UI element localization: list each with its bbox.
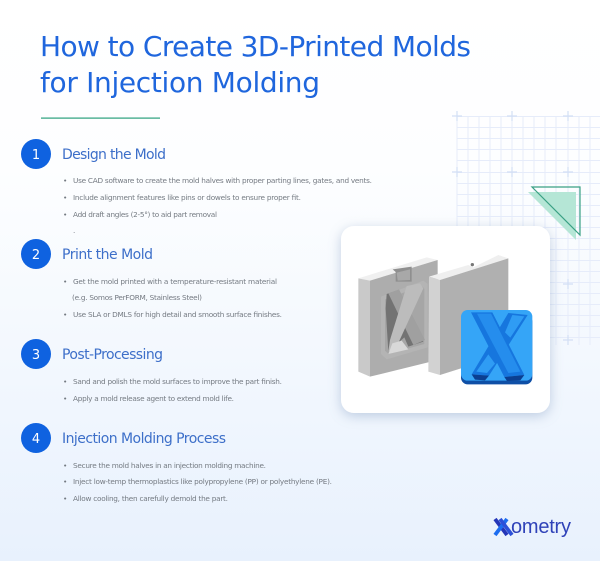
title: How to Create 3D-Printed Molds [40,30,471,63]
right mold half [428,255,508,375]
step 4: injection molding process [21,423,332,503]
step 2 number badge [21,239,51,269]
step 4 heading: Injection Molding Process [62,431,226,447]
step 2 bullets: • [63,310,67,319]
left mold half [358,257,438,377]
step 1 bullets: • [63,210,67,219]
step 2 heading: Print the Mold [62,247,153,263]
step 2 bullets: • [63,277,67,286]
step 3 bullets: • [63,394,67,403]
step 1 bullets: Add draft angles (2-5°) to aid part removal [73,210,217,219]
step 3 number badge [21,339,51,369]
step 1 bullets [63,176,372,235]
step 4 bullets: Allow cooling, then carefully demold the part. [73,494,228,503]
step 3 heading: Post-Processing [62,347,163,363]
step 4 bullets [63,461,332,503]
background grid [452,111,600,345]
step 2 bullets: (e.g. Somos PerFORM, Stainless Steel) [72,293,202,302]
title [40,30,471,99]
step 4 number badge: 4 [32,432,40,447]
step 4 number badge [21,423,51,453]
step 4 bullets: Inject low-temp thermoplastics like polypropylene (PP) or polyethylene (PE). [73,477,332,486]
step 3: post-processing [21,339,282,403]
step 4 bullets: • [63,477,67,486]
title divider [41,118,160,119]
title: for Injection Molding [40,66,320,99]
step 1 bullets: Use CAD software to create the mold halves with proper parting lines, gates, and vents. [73,176,372,185]
step 1 bullets: • [63,176,67,185]
image card [341,226,550,413]
blue X part [461,310,532,384]
logo wordmark: ometry [511,516,571,538]
step 1: design the mold [21,139,372,235]
step 3 bullets [63,377,282,403]
step 1 number badge [21,139,51,169]
mold illustration [358,255,532,384]
step 2: print the mold [21,239,282,319]
step 1 bullets: . [73,226,75,235]
step 3 bullets: • [63,377,67,386]
step 3 number badge: 3 [32,348,40,363]
step 3 bullets: Sand and polish the mold surfaces to improve the part finish. [73,377,282,386]
step 4 bullets: Secure the mold halves in an injection molding machine. [73,461,266,470]
logo mark [495,519,512,535]
step 1 heading: Design the Mold [62,147,166,163]
step 2 number badge: 2 [32,248,40,263]
step 2 bullets [63,277,282,319]
xometry logo [495,516,571,538]
step 2 bullets: Get the mold printed with a temperature-resistant material [73,277,277,286]
step 4 bullets: • [63,461,67,470]
step 1 number badge: 1 [32,148,40,163]
step 3 bullets: Apply a mold release agent to extend mold life. [73,394,234,403]
step 4 bullets: • [63,494,67,503]
step 1 bullets: Include alignment features like pins or dowels to ensure proper fit. [73,193,301,202]
step 1 bullets: • [63,193,67,202]
decorative green triangle [528,187,580,240]
step 2 bullets: Use SLA or DMLS for high detail and smooth surface finishes. [73,310,282,319]
